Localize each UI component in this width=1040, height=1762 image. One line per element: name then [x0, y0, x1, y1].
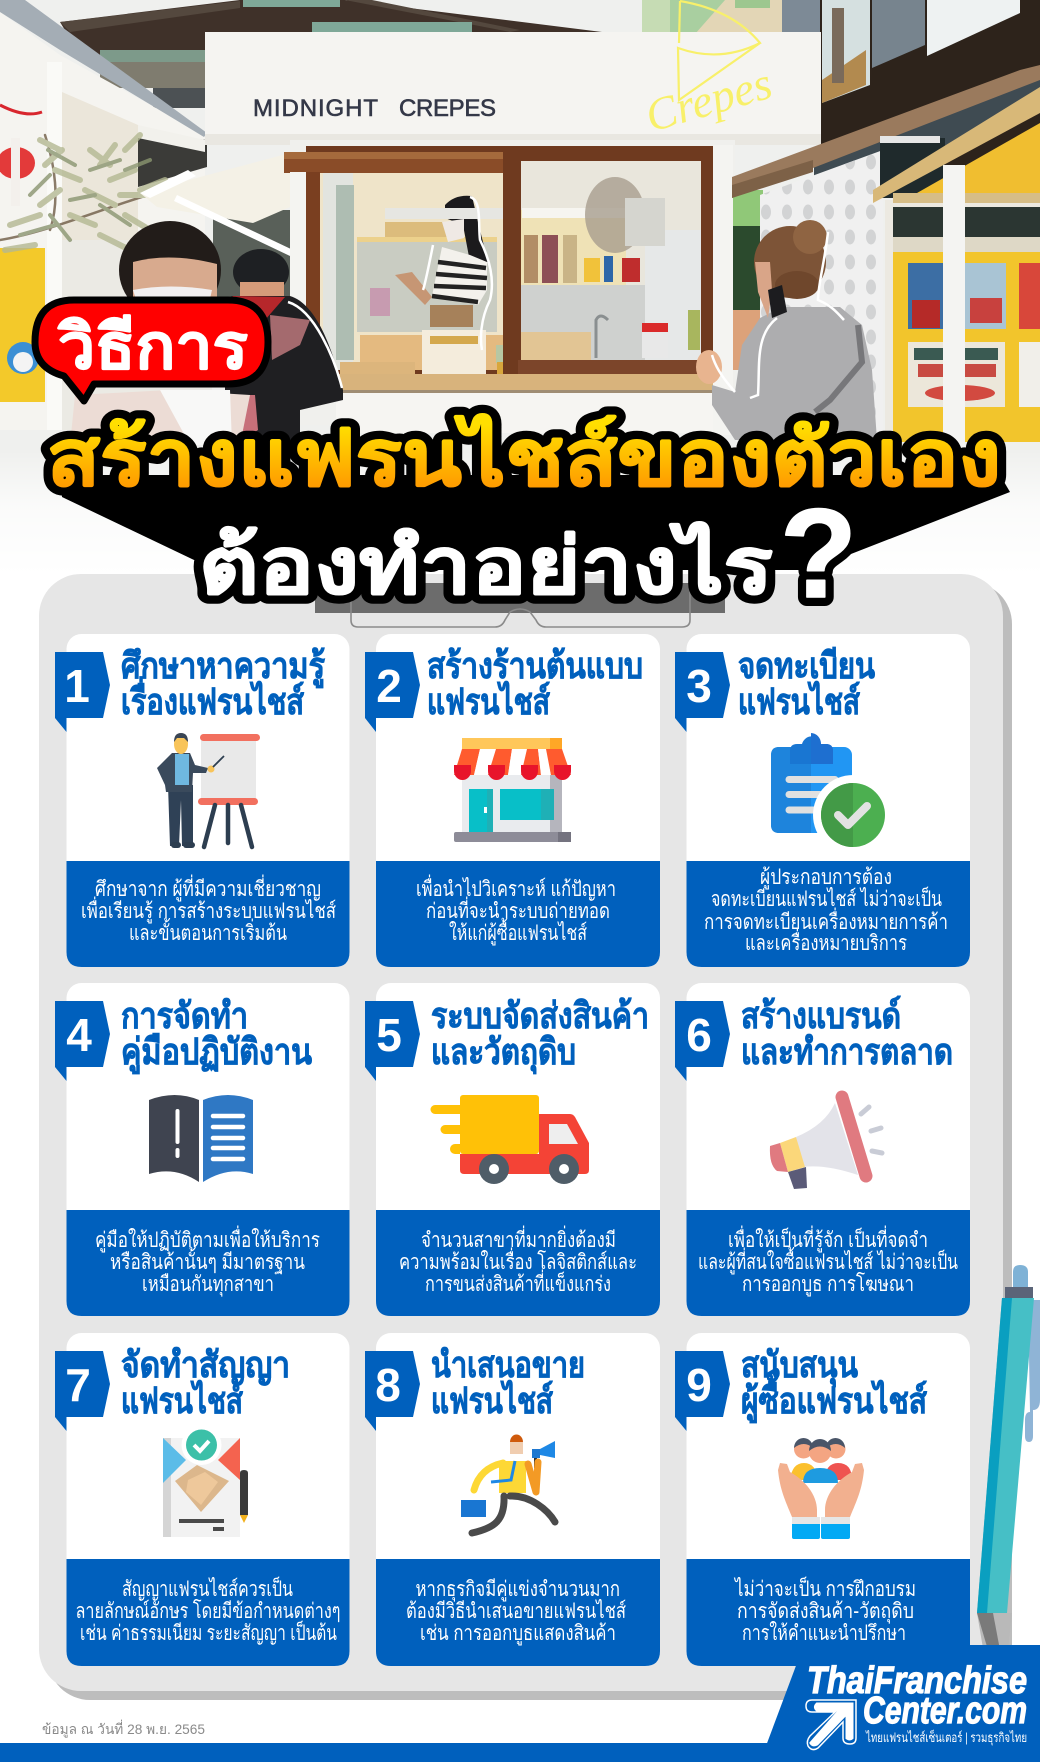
ribbon 2: 2 [376, 660, 402, 712]
heading 2 [427, 645, 643, 722]
heading 6: สร้างแบรนด์ [741, 995, 901, 1036]
title badge: วิธีการ [35, 300, 268, 401]
heading 7: จัดทำสัญญา [121, 1344, 290, 1386]
heading 4: การจัดทำ [121, 995, 248, 1036]
white side awning [140, 153, 293, 320]
neon crepes sign [640, 1, 777, 142]
card 4 [55, 983, 350, 1316]
description 8: ต้องมีวิธีนำเสนอขายแฟรนไชส์ [406, 1599, 626, 1623]
ribbon 4: 4 [66, 1009, 92, 1061]
card 6 [675, 983, 970, 1316]
heading 3: แฟรนไชส์ [738, 680, 860, 722]
sign text [253, 95, 496, 122]
description 4: คู่มือให้ปฏิบัติตามเพื่อให้บริการ [95, 1225, 320, 1253]
description 7: เช่น ค่าธรรมเนียม ระยะสัญญา เป็นต้น [80, 1619, 337, 1645]
heading 5: ระบบจัดส่งสินค้า [431, 995, 649, 1036]
heading 1 [121, 645, 326, 722]
description 3: ผู้ประกอบการต้อง [760, 866, 892, 890]
title line 2 [199, 483, 857, 624]
house behind kiosk [60, 0, 610, 140]
ribbon 5 [365, 1001, 420, 1081]
left white building and roof [0, 0, 212, 430]
boy in white mask [70, 221, 250, 445]
neon crepes sign: Crepes [640, 57, 777, 142]
card 9 [675, 1333, 970, 1666]
description 7 [76, 1575, 340, 1645]
heading 5: และวัตถุดิบ [431, 1031, 576, 1075]
footer blue band [0, 1743, 1040, 1762]
title line 2: ต้องทำอย่างไร [199, 521, 773, 610]
description 6 [698, 1225, 958, 1297]
icon: shop [454, 738, 571, 842]
description 6: เพื่อให้เป็นที่รู้จัก เป็นที่จดจำ [728, 1225, 928, 1253]
main grey clipboard panel [39, 574, 1012, 1700]
description 1 [81, 874, 336, 945]
heading 4 [121, 995, 312, 1075]
ribbon 9 [675, 1351, 730, 1431]
source note: ข้อมูล ณ วันที่ 28 พ.ย. 2565 [42, 1720, 205, 1738]
heading 4: คู่มือปฏิบัติงาน [121, 1031, 312, 1075]
foliage branches [0, 135, 165, 250]
sign text: CREPES [399, 95, 496, 122]
description 3: และเครื่องหมายบริการ [745, 928, 907, 955]
heading 1: ศึกษาหาความรู้ [121, 645, 326, 689]
ribbon 3 [675, 652, 730, 732]
icon: delivery truck [430, 1095, 589, 1184]
description 1: และขั้นตอนการเริ่มต้น [129, 918, 287, 945]
upper right facades [642, 0, 1040, 190]
heading 7 [121, 1344, 290, 1421]
heading 9 [741, 1344, 927, 1424]
title line 1: สร้างแฟรนไชส์ของตัวเอง [47, 413, 1001, 502]
description 9: ไม่ว่าจะเป็น การฝึกอบรม [733, 1575, 916, 1601]
description 5: ความพร้อมในเรื่อง โลจิสติกส์และ [399, 1247, 637, 1274]
title line 2: ? [780, 483, 857, 624]
ribbon 7 [55, 1351, 110, 1431]
card 8 [365, 1333, 660, 1666]
heading 8: แฟรนไชส์ [431, 1379, 553, 1421]
ribbon 1: 1 [64, 660, 90, 712]
icon: contract with handshake [163, 1425, 248, 1537]
ribbon 3: 3 [686, 660, 712, 712]
heading 9: สนับสนุน [741, 1344, 858, 1388]
ribbon 4 [55, 1001, 110, 1081]
description 5: การขนส่งสินค้าที่แข็งแกร่ง [425, 1269, 611, 1296]
logo: ThaiFranchiseCenter.com [760, 1645, 1040, 1762]
description 9: การจัดส่งสินค้า-วัตถุดิบ [737, 1600, 914, 1624]
card 5 [365, 983, 660, 1316]
description 9: การให้คำแนะนำปรึกษา [742, 1621, 906, 1645]
card 2 [365, 634, 660, 967]
icon: clipboard with check [771, 733, 893, 855]
description 4 [95, 1225, 320, 1297]
ribbon 5: 5 [376, 1009, 402, 1061]
description 2 [416, 874, 616, 946]
hero photo: Midnight Crepes kiosk [0, 0, 1040, 575]
description 9 [733, 1575, 916, 1645]
second customer in black shirt [225, 249, 343, 445]
description 4: หรือสินค้านั้นๆ มีมาตรฐาน [110, 1247, 305, 1274]
sign text: MIDNIGHT [253, 95, 378, 122]
title badge: วิธีการ: วิธีการ [57, 313, 248, 382]
counter [290, 145, 733, 435]
description 5 [399, 1225, 637, 1296]
description 3 [704, 866, 948, 955]
heading 3: จดทะเบียน [738, 645, 875, 686]
icon: open manual [149, 1095, 253, 1182]
icon: presenter at flipchart [157, 733, 260, 848]
description 5: จำนวนสาขาที่มากยิ่งต้องมี [421, 1225, 616, 1252]
right yellow shop [873, 87, 1040, 460]
title line 1: สร้างแฟรนไชส์ของตัวเอง [47, 413, 1001, 502]
staff member [385, 196, 503, 350]
description 6: การออกบูธ การโฆษณา [742, 1272, 914, 1297]
description 8 [406, 1578, 626, 1646]
woman customer [696, 220, 877, 440]
heading 2: สร้างร้านต้นแบบ [427, 645, 643, 686]
description 1: ศึกษาจาก ผู้ที่มีความเชี่ยวชาญ [95, 874, 321, 902]
heading 8 [431, 1344, 585, 1421]
description 2: ก่อนที่จะนำระบบถ่ายทอด [426, 896, 610, 923]
icon: megaphone [770, 1097, 882, 1189]
heading 6 [741, 995, 953, 1072]
card 3 [675, 634, 970, 967]
card 7 [55, 1333, 350, 1666]
heading 7: แฟรนไชส์ [121, 1379, 243, 1421]
description 2: ให้แก่ผู้ซื้อแฟรนไชส์ [449, 918, 587, 946]
title line 2: ต้องทำอย่างไร [199, 521, 773, 610]
title banner black background [60, 475, 1010, 570]
heading 6: และทำการตลาด [741, 1031, 953, 1072]
heading 3 [738, 645, 875, 722]
ribbon 9: 9 [686, 1359, 712, 1411]
ribbon 6: 6 [686, 1009, 712, 1061]
heading 9: ผู้ซื้อแฟรนไชส์ [741, 1374, 927, 1424]
description 8: เช่น การออกบูธแสดงสินค้า [420, 1622, 616, 1646]
logo arrow [806, 1700, 856, 1750]
description 7: ลายลักษณ์อักษร โดยมีข้อกำหนดต่างๆ [76, 1599, 340, 1623]
kiosk window right [503, 146, 714, 374]
description 7: สัญญาแฟรนไชส์ควรเป็น [122, 1575, 293, 1601]
kiosk window left [284, 146, 714, 387]
heading 2: แฟรนไชส์ [427, 680, 550, 722]
description 2: เพื่อนำไปวิเคราะห์ แก้ปัญหา [416, 874, 616, 901]
ribbon 7: 7 [65, 1359, 91, 1411]
description 4: เหมือนกันทุกสาขา [142, 1273, 274, 1297]
heading 8: นำเสนอขาย [431, 1344, 585, 1385]
icon: running salesman with megaphone [461, 1435, 555, 1533]
ribbon 2 [365, 652, 420, 732]
description 3: การจดทะเบียนเครื่องหมายการค้า [704, 907, 948, 934]
description 3: จดทะเบียนแฟรนไชส์ ไม่ว่าจะเป็น [711, 885, 942, 911]
card 1 [55, 634, 350, 967]
heading 5 [431, 995, 649, 1075]
right perforated wall and thatched roof [732, 65, 1040, 435]
description 6: และผู้ที่สนใจซื้อแฟรนไชส์ ไม่ว่าจะเป็น [698, 1247, 958, 1275]
ribbon 1 [55, 652, 110, 732]
description 1: เพื่อเรียนรู้ การสร้างระบบแฟรนไชส์ [81, 896, 336, 924]
kiosk white sign board and body [205, 1, 821, 425]
ribbon 8: 8 [375, 1359, 401, 1411]
lower photo fade [0, 450, 1040, 575]
ribbon 8 [365, 1351, 420, 1431]
heading 1: เรื่องแฟรนไชส์ [121, 676, 304, 722]
description 8: หากธุรกิจมีคู่แข่งจำนวนมาก [416, 1578, 620, 1602]
icon: hands supporting people [778, 1438, 864, 1539]
title line 2: ? [780, 483, 857, 624]
pen illustration [977, 1265, 1040, 1660]
ribbon 6 [675, 1001, 730, 1081]
